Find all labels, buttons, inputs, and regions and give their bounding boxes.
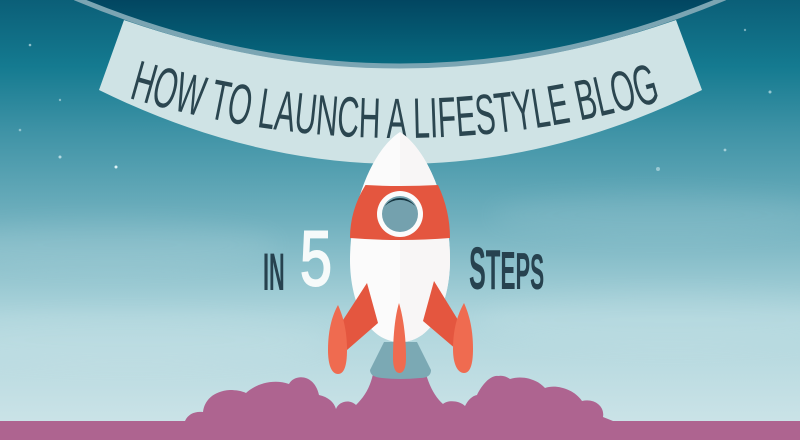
right fin bbox=[453, 303, 473, 373]
rocket nozzle bbox=[370, 342, 431, 379]
right wing bbox=[423, 281, 458, 350]
rocket body bbox=[350, 132, 450, 342]
text: IN: IN bbox=[263, 242, 285, 302]
rocket body shade bbox=[400, 132, 450, 342]
text: 5: 5 bbox=[300, 214, 332, 302]
stars bbox=[19, 9, 771, 171]
rocket red band bbox=[350, 185, 450, 240]
title banner bbox=[99, 20, 702, 164]
rocket bbox=[328, 132, 473, 379]
left fin bbox=[328, 305, 347, 374]
heading: HOW TO LAUNCH A LIFESTYLE BLOG bbox=[131, 61, 658, 138]
text: STEPS: STEPS bbox=[469, 234, 544, 302]
exhaust smoke bbox=[0, 374, 800, 440]
center fin bbox=[393, 303, 406, 373]
background clouds bbox=[0, 193, 800, 366]
left wing bbox=[343, 283, 378, 350]
rocket window bbox=[377, 191, 423, 237]
dome arc rim bbox=[75, 0, 725, 66]
banner ribbon bbox=[99, 20, 702, 164]
dome arc at top bbox=[75, 0, 725, 66]
